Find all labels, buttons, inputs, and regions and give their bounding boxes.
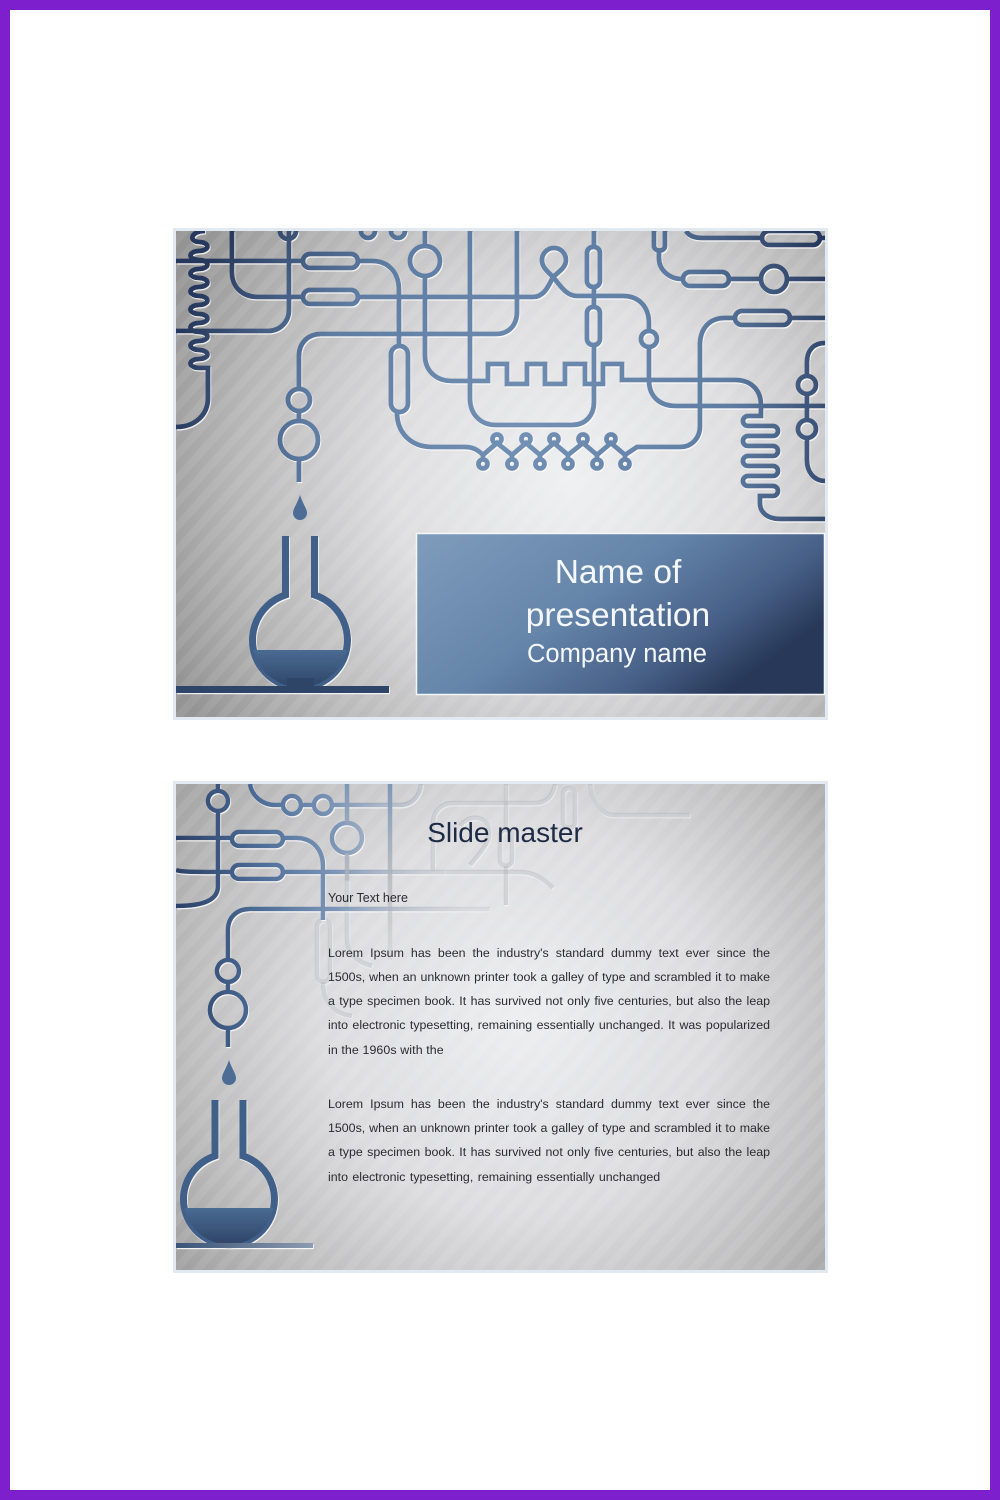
slide 2 second paragraph: 1500s, when an unknown printer took a galley of type and scrambled it to make: [328, 1121, 770, 1135]
presentation title: presentation: [526, 597, 710, 634]
slide 2 heading: Slide master: [427, 817, 583, 848]
slide 2 second paragraph: into electronic typesetting, remaining essentially unchanged: [328, 1170, 660, 1184]
slide 2 first paragraph: Lorem Ipsum has been the industry's standard dummy text ever since the: [328, 946, 770, 960]
slide 1: title slide: [173, 228, 828, 720]
slide 1 background: [173, 228, 828, 720]
presentation title: [526, 554, 710, 668]
slide 2 drop: [222, 1060, 236, 1085]
slide 2 faint background pipes: [317, 784, 690, 1016]
slide 2 first paragraph: in the 1960s with the: [328, 1043, 444, 1057]
slide 2 pipework fading to the right: [176, 784, 490, 1047]
slide 2 first paragraph: into electronic typesetting, remaining essentially unchanged. It was popularized: [328, 1018, 770, 1032]
slide 1 pipework network: [176, 231, 825, 519]
slide 2 second paragraph: [328, 1097, 770, 1184]
slide 2 second paragraph: a type specimen book. It has survived not only five centuries, but also the leap: [328, 1145, 770, 1159]
slide 2 first paragraph: 1500s, when an unknown printer took a galley of type and scrambled it to make: [328, 970, 770, 984]
slide 2 subheading: Your Text here: [328, 891, 408, 905]
presentation title: Company name: [527, 640, 707, 668]
presentation title: Name of: [555, 554, 682, 591]
slide 2 first paragraph: [328, 946, 770, 1057]
title box: [416, 534, 824, 694]
slide 2 round flask: [176, 1100, 313, 1248]
slide 2 vertical fading pipes: [347, 784, 390, 960]
slide 1 drop: [293, 495, 307, 520]
slide 2 second paragraph: Lorem Ipsum has been the industry's standard dummy text ever since the: [328, 1097, 770, 1111]
slide 2 first paragraph: a type specimen book. It has survived not only five centuries, but also the leap: [328, 994, 770, 1008]
slide 1 round flask: [176, 536, 389, 693]
slide 2 background: [173, 781, 828, 1273]
slide 2: slide master: [173, 781, 828, 1273]
